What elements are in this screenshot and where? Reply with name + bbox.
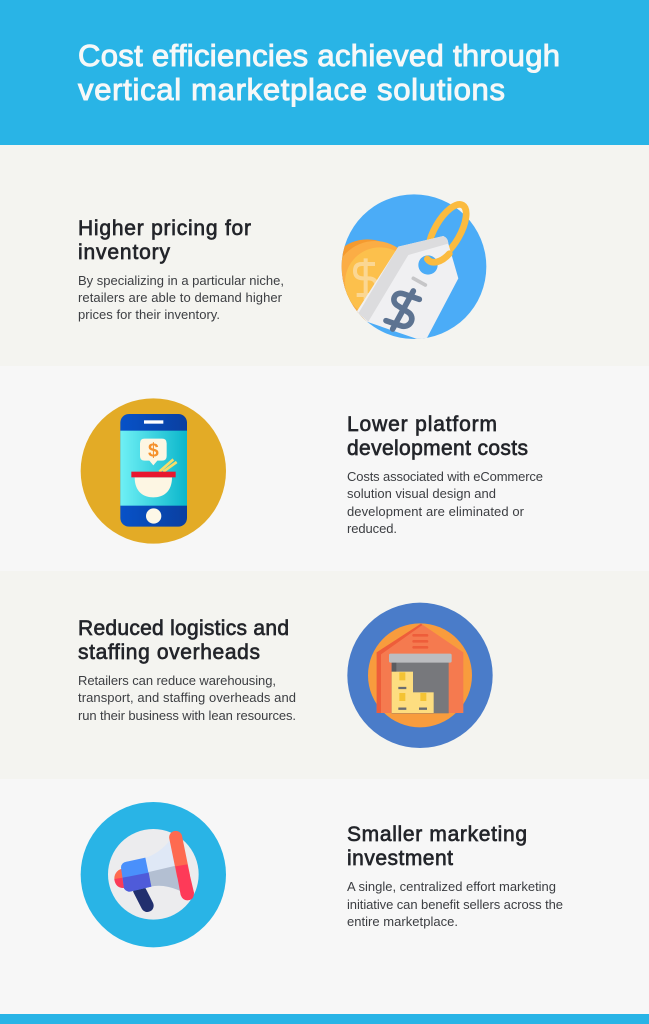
icon: phone with noodle bowl: $ (148, 441, 159, 462)
text block: smaller marketing investment: A single, centralized effort marketing (347, 879, 556, 894)
text block: lower platform development costs: Costs associated with eCommerce (347, 469, 543, 484)
title: vertical marketplace solutions (78, 72, 505, 107)
text block: smaller marketing investment: initiative can benefit sellers across the (347, 897, 563, 912)
text block: smaller marketing investment (347, 823, 563, 929)
icon: price tag (342, 194, 486, 339)
text block: reduced logistics and staffing overheads: staffing overheads (78, 641, 260, 664)
text block: lower platform development costs: development costs (347, 437, 528, 460)
title (78, 38, 560, 107)
title: Cost efficiencies achieved through (78, 38, 560, 73)
text block: reduced logistics and staffing overheads: Retailers can reduce warehousing, (78, 673, 276, 688)
text block: higher pricing for inventory: By specializing in a particular niche, (78, 273, 284, 288)
text block: higher pricing for inventory: retailers are able to demand higher (78, 290, 283, 305)
text block: lower platform development costs: development are eliminated or (347, 504, 525, 519)
text block: higher pricing for inventory (78, 217, 284, 322)
text block: lower platform development costs (347, 413, 543, 536)
text block: reduced logistics and staffing overheads: run their business with lean resources. (78, 708, 296, 723)
panel: higher pricing background (0, 145, 649, 366)
panel: platform costs background (0, 366, 649, 571)
footer band (0, 1014, 649, 1024)
text block: reduced logistics and staffing overheads: transport, and staffing overheads and (78, 690, 296, 705)
icon: warehouse (347, 603, 493, 748)
text block: lower platform development costs: solution visual design and (347, 486, 496, 501)
text block: reduced logistics and staffing overheads: Reduced logistics and (78, 617, 289, 640)
text block: smaller marketing investment: investment (347, 847, 453, 870)
header band (0, 0, 649, 145)
text block: lower platform development costs: reduced. (347, 521, 397, 536)
icon: megaphone (81, 802, 226, 947)
text block: lower platform development costs: Lower platform (347, 413, 497, 436)
text block: reduced logistics and staffing overheads (78, 617, 296, 723)
panel: marketing background (0, 779, 649, 1014)
text block: smaller marketing investment: Smaller marketing (347, 823, 527, 846)
text block: smaller marketing investment: entire marketplace. (347, 914, 458, 929)
text block: higher pricing for inventory: inventory (78, 241, 170, 264)
panel: logistics background (0, 571, 649, 779)
icon: phone with noodle bowl (81, 398, 226, 544)
text block: higher pricing for inventory: Higher pricing for (78, 217, 251, 240)
text block: higher pricing for inventory: prices for their inventory. (78, 307, 220, 322)
